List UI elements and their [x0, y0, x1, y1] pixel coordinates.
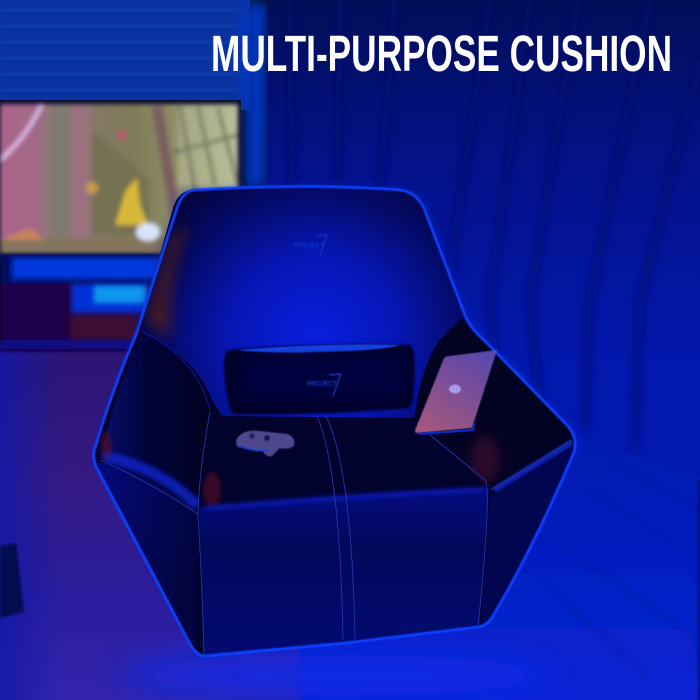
game controller: [236, 431, 294, 456]
left arm front: [98, 462, 198, 655]
chair back: [140, 188, 464, 420]
television: [0, 100, 241, 258]
headrest logo: [294, 235, 327, 255]
right arm reflection: [471, 436, 499, 484]
seat top: [198, 416, 490, 512]
right arm panel: [417, 318, 574, 488]
seat front: [199, 488, 489, 656]
chair blue rim light: [94, 186, 575, 656]
chair glow: [95, 187, 576, 656]
laptop: [415, 350, 497, 435]
cushion logo: PROJECT: [307, 381, 338, 388]
tv stand: [0, 254, 170, 352]
lumbar cushion: [224, 344, 414, 414]
background: curtains: [268, 0, 700, 480]
floor: [0, 345, 700, 700]
left arm reflection: [100, 431, 112, 459]
headrest logo: PROJECT: [294, 242, 324, 249]
armchair: [94, 186, 575, 656]
background: brick wall: [0, 0, 269, 190]
stitching: [100, 412, 572, 655]
dark object on floor: [0, 543, 24, 618]
cushion logo: [307, 374, 341, 396]
warm reflection on back: [146, 225, 188, 338]
laptop apple logo: [449, 384, 461, 394]
left arm inner panel: [100, 332, 210, 510]
chair body: [94, 186, 575, 656]
